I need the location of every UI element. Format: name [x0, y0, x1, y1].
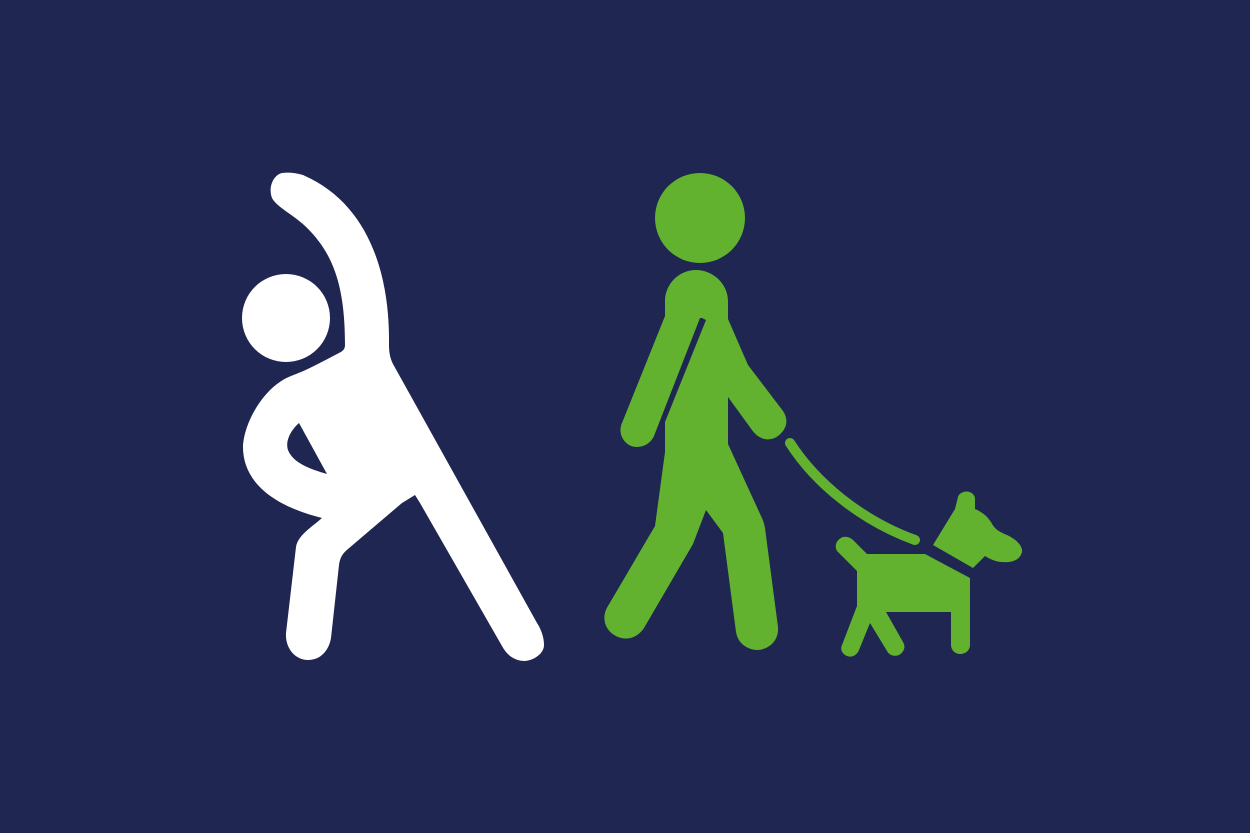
- dog head: [933, 492, 1022, 568]
- stretching person body: [243, 173, 544, 661]
- walking person left arm: [620, 316, 700, 447]
- walking person head: [655, 173, 745, 263]
- icon: stretching person: [242, 173, 544, 661]
- walking person left arm gap: [665, 318, 706, 422]
- walking person torso and right arm and legs: [604, 270, 786, 650]
- leash: [790, 443, 915, 540]
- icon: person walking dog: [604, 173, 1022, 657]
- stretching person head: [242, 274, 330, 362]
- dog body: [836, 537, 970, 657]
